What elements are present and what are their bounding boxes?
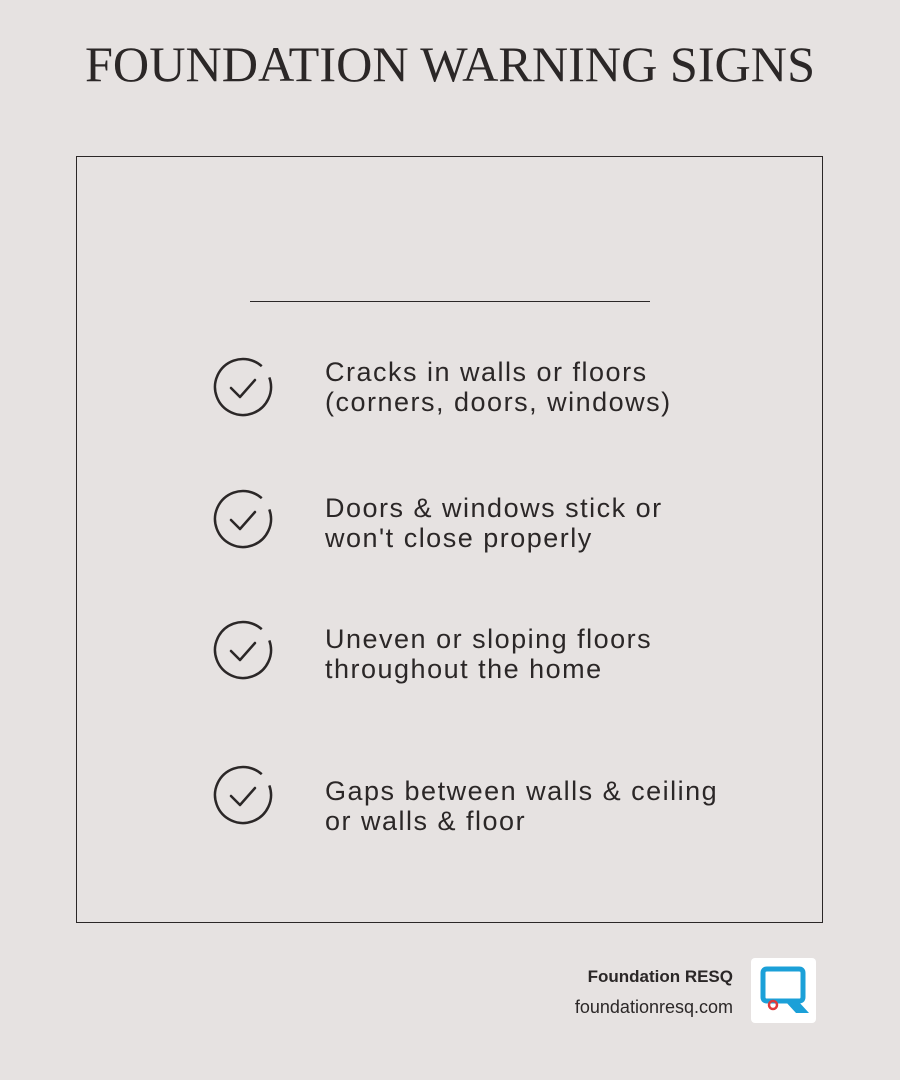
text: item 2: won't close properly [325, 523, 593, 553]
text: item 4: Gaps between walls & ceiling [325, 776, 718, 806]
icon: check 4 [214, 766, 272, 824]
text: item 3: Uneven or sloping floors [325, 624, 652, 654]
text: item 4 [325, 776, 718, 836]
divider line [250, 301, 650, 302]
text: item 1 [325, 357, 672, 417]
brand text [575, 967, 733, 1017]
brand text: Foundation RESQ [588, 967, 733, 986]
text: item 1: Cracks in walls or floors [325, 357, 648, 387]
text: item 2 [325, 493, 663, 553]
title: FOUNDATION WARNING SIGNS [85, 36, 815, 92]
text: item 3: throughout the home [325, 654, 603, 684]
text: item 3 [325, 624, 652, 684]
text: item 1: (corners, doors, windows) [325, 387, 672, 417]
text: item 2: Doors & windows stick or [325, 493, 663, 523]
text: item 4: or walls & floor [325, 806, 526, 836]
icon: logo [751, 958, 816, 1023]
icon: check 3 [214, 620, 272, 680]
brand text: foundationresq.com [575, 997, 733, 1017]
icon: check 2 [214, 490, 272, 548]
panel: warning signs [76, 156, 823, 923]
icon: check 1 [214, 358, 272, 416]
